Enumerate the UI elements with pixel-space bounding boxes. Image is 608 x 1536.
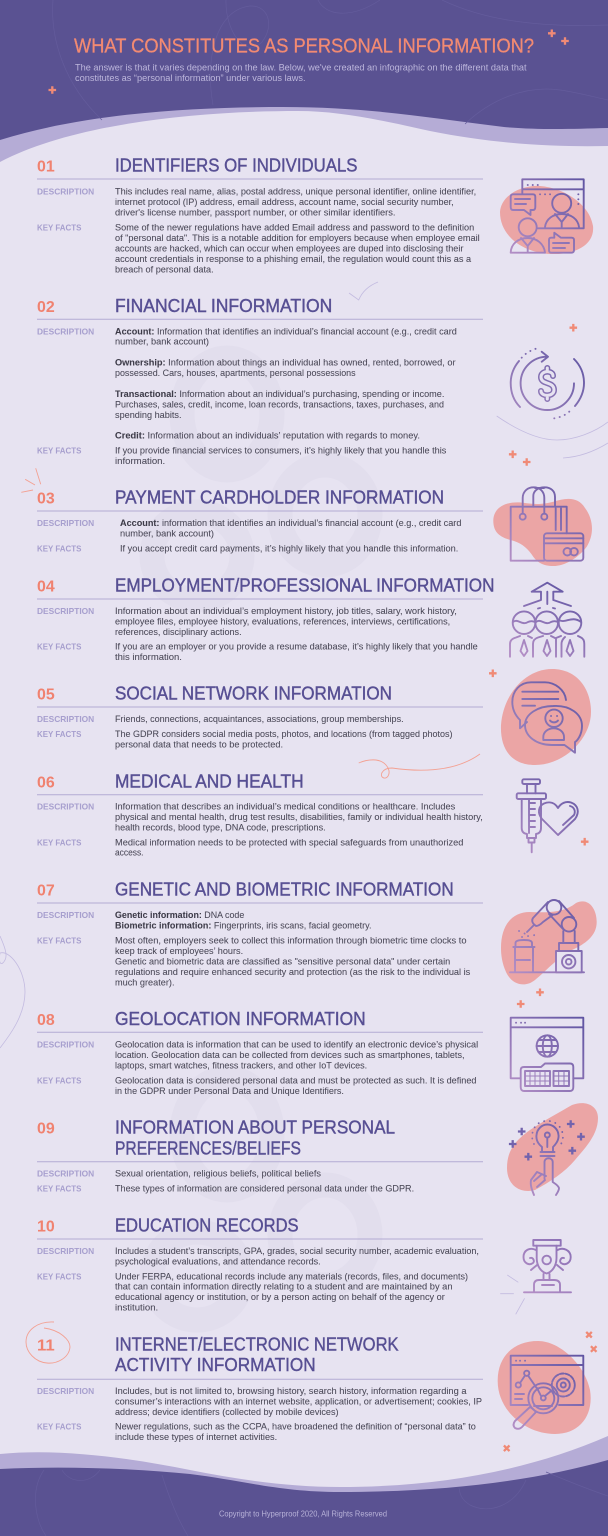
description text: employee files, employee history, evaluations, references, interviews, certifications,	[115, 616, 450, 626]
label key facts: KEY FACTS	[37, 1271, 82, 1281]
section 10	[37, 1215, 483, 1313]
description text: address; device identifiers (collected by mobile devices)	[115, 1407, 338, 1417]
description text	[115, 802, 483, 833]
robot plus signs	[517, 838, 588, 1008]
footer decorative lines	[35, 1470, 608, 1536]
key facts text	[115, 446, 447, 466]
label key facts: KEY FACTS	[37, 1422, 82, 1432]
label key facts: KEY FACTS	[37, 544, 82, 554]
icon: genetic robot arm	[501, 838, 597, 1008]
label description: DESCRIPTION	[37, 606, 94, 616]
icon: social chat bubbles	[501, 669, 591, 765]
section 02	[37, 296, 483, 466]
description text	[115, 186, 476, 217]
number 05: 05	[37, 687, 55, 704]
label description: DESCRIPTION	[37, 1246, 94, 1256]
key facts text: information.	[115, 456, 165, 466]
section 04	[37, 575, 494, 662]
key facts text	[115, 1422, 476, 1442]
description text: Account: Information that identifies an individual’s financial account (e.g., credit card	[115, 326, 457, 336]
key facts text: Most often, employers seek to collect this information through biometric time clocks to	[115, 936, 466, 946]
key facts text	[115, 642, 478, 662]
heading 02: FINANCIAL INFORMATION	[115, 296, 332, 316]
key facts text: much greater).	[115, 977, 174, 987]
heading 09: PREFERENCES/BELIEFS	[115, 1138, 301, 1158]
key facts text: keep track of employees’ hours.	[115, 946, 243, 956]
description text	[115, 1386, 482, 1417]
heading 11	[115, 1334, 399, 1375]
number 09: 09	[37, 1120, 55, 1137]
icon: finance dollar cycle	[509, 324, 584, 466]
number 11: 11	[37, 1337, 55, 1354]
description text: internet protocol (IP) address, email address, account name, social security number,	[115, 197, 454, 207]
description text: Transactional: Information about an individual’s purchasing, spending or income.	[115, 389, 444, 399]
key facts text: in the GDPR under Personal Data and Unique Identifiers.	[115, 1086, 344, 1096]
number 04: 04	[37, 578, 55, 595]
key facts text: access.	[115, 848, 144, 858]
footer panel	[0, 1460, 608, 1536]
description text: possessed. Cars, houses, apartments, personal possessions	[115, 368, 356, 378]
bottom wave band	[0, 1436, 608, 1536]
number 01: 01	[37, 159, 55, 176]
description text: Sexual orientation, religious beliefs, political beliefs	[115, 1169, 321, 1179]
label key facts: KEY FACTS	[37, 837, 82, 847]
description text: Credit: Information about an individuals’ reputation with regards to money.	[115, 431, 420, 441]
description text: Account: information that identifies an individual’s financial account (e.g., credit card	[120, 518, 461, 528]
description text	[115, 606, 457, 637]
key facts text: If you accept credit card payments, it’s highly likely that you handle this information.	[120, 544, 458, 554]
decorative circle around 11	[26, 1322, 70, 1363]
description text: health records, blood type, DNA code, prescriptions.	[115, 823, 326, 833]
label description: DESCRIPTION	[37, 1386, 94, 1396]
description text: consumer’s interactions with an internet website, application, or advertisement; cookies, IP	[115, 1397, 482, 1407]
watermark rings	[152, 358, 370, 1320]
heading 11: INTERNET/ELECTRONIC NETWORK	[115, 1334, 399, 1354]
icon: shopping bag and card	[493, 487, 592, 566]
key facts text	[115, 1271, 468, 1313]
key facts text: of "personal data". This is a notable addition for employers because when employee email	[115, 233, 480, 243]
heading 04: EMPLOYMENT/PROFESSIONAL INFORMATION	[115, 575, 494, 595]
decorative coral swirl	[359, 754, 480, 778]
description text: location. Geolocation data can be collected from devices such as smartphones, tablets,	[115, 1050, 464, 1060]
key facts text	[115, 837, 463, 858]
heading 09	[115, 1117, 395, 1158]
label key facts: KEY FACTS	[37, 936, 82, 946]
intro text: The answer is that it varies depending on the law. Below, we've created an infographic on the different data that	[75, 63, 527, 73]
icon: syringe and heart	[517, 779, 578, 852]
key facts text	[115, 223, 480, 274]
description text: number, bank account)	[120, 528, 214, 538]
label description: DESCRIPTION	[37, 326, 94, 336]
purple plus signs	[509, 1120, 585, 1160]
description text	[115, 1246, 479, 1266]
description text: Includes, but is not limited to, browsing history, search history, information regarding a	[115, 1386, 466, 1396]
number 07: 07	[37, 882, 55, 899]
section 11	[37, 1334, 483, 1442]
label key facts: KEY FACTS	[37, 223, 82, 233]
section 01	[37, 156, 483, 274]
description text	[115, 1040, 478, 1071]
key facts text	[115, 1076, 476, 1096]
heading 09: INFORMATION ABOUT PERSONAL	[115, 1117, 395, 1137]
label description: DESCRIPTION	[37, 518, 94, 528]
key facts text: personal data that needs to be protected.	[115, 740, 283, 750]
description text: Geolocation data is information that can be used to identify an electronic device’s physical	[115, 1040, 478, 1050]
number 10: 10	[37, 1218, 55, 1235]
description text	[120, 518, 461, 538]
plus near social icon	[489, 670, 497, 677]
description text: Biometric information: Fingerprints, iris scans, facial geometry.	[115, 921, 372, 931]
description text: Genetic information: DNA code	[115, 910, 244, 920]
icon: personal beliefs lightbulb	[507, 1103, 598, 1195]
label key facts: KEY FACTS	[37, 642, 82, 652]
intro text	[75, 63, 527, 83]
heading 03: PAYMENT CARDHOLDER INFORMATION	[115, 487, 444, 507]
header panel	[0, 0, 608, 140]
header wave band	[0, 0, 608, 162]
label description: DESCRIPTION	[37, 1040, 94, 1050]
key facts text: regulations and require enhanced security and protection (as the risk to the individual is	[115, 967, 471, 977]
heading 10: EDUCATION RECORDS	[115, 1215, 299, 1235]
finance plus signs	[509, 324, 577, 466]
description text	[115, 910, 372, 931]
description text: driver's license number, passport number, or other similar identifiers.	[115, 207, 396, 217]
description text: physical and mental health, drug test results, disabilities, family or individual health history,	[115, 812, 483, 822]
label key facts: KEY FACTS	[37, 1076, 82, 1086]
title: WHAT CONSTITUTES AS PERSONAL INFORMATION?	[74, 36, 534, 58]
description text: Information that describes an individual’s medical conditions or healthcare. Includes	[115, 802, 456, 812]
description text: psychological evaluations, and attendance records.	[115, 1256, 321, 1266]
key facts text: Some of the newer regulations have added Email address and password to the definition	[115, 223, 474, 233]
key facts text: Newer regulations, such as the CCPA, have broadened the definition of “personal data” to	[115, 1422, 476, 1432]
icon: education trophy	[524, 1240, 571, 1292]
label key facts: KEY FACTS	[37, 446, 82, 456]
coral x marks	[504, 1332, 596, 1451]
key facts text: educational agency or institution, or by a person acting on behalf of the agency or	[115, 1292, 445, 1302]
number 08: 08	[37, 1012, 55, 1029]
description text: references, disciplinary actions.	[115, 627, 242, 637]
key facts text: Under FERPA, educational records include any materials (records, files, and documents)	[115, 1271, 468, 1281]
key facts text	[115, 729, 453, 750]
heading 01: IDENTIFIERS OF INDIVIDUALS	[115, 156, 358, 176]
intro text: constitutes as “personal information” under various laws.	[75, 73, 306, 83]
key facts text: The GDPR considers social media posts, photos, and locations (from tagged photos)	[115, 729, 453, 739]
key facts text: Genetic and biometric data are classified as "sensitive personal data" under certain	[115, 957, 450, 967]
description text: spending habits.	[115, 410, 182, 420]
section 08	[37, 1009, 483, 1096]
description text: Information about an individual’s employment history, job titles, salary, work history,	[115, 606, 457, 616]
description text: number, bank account)	[115, 337, 209, 347]
number 06: 06	[37, 774, 55, 791]
key facts text: These types of information are considered personal data under the GDPR.	[115, 1184, 414, 1194]
key facts text	[115, 936, 471, 987]
key facts text: that can contain information directly relating to a student and are maintained by an	[115, 1282, 452, 1292]
heading 07: GENETIC AND BIOMETRIC INFORMATION	[115, 879, 454, 899]
decorative coral rays	[21, 468, 41, 492]
decorative left curve	[0, 936, 25, 1048]
key facts text: account credentials in response to a phishing email, the regulation would count this as a	[115, 254, 471, 264]
description text: laptops, smart watches, fitness trackers, and other IoT devices.	[115, 1061, 367, 1071]
description text: Friends, connections, acquaintances, associations, group memberships.	[115, 714, 404, 724]
label description: DESCRIPTION	[37, 1169, 94, 1179]
heading 05: SOCIAL NETWORK INFORMATION	[115, 684, 392, 704]
heading 08: GEOLOCATION INFORMATION	[115, 1009, 366, 1029]
label description: DESCRIPTION	[37, 910, 94, 920]
description text: Purchases, sales, credit, income, loan records, transactions, taxes, purchases, and	[115, 399, 444, 409]
section 09	[37, 1117, 483, 1194]
number 02: 02	[37, 299, 55, 316]
icon: internet analytics	[498, 1332, 596, 1451]
section 06	[37, 771, 483, 858]
icon: employees group	[510, 583, 584, 657]
label key facts: KEY FACTS	[37, 729, 82, 739]
description text: This includes real name, alias, postal address, unique personal identifier, online identifier,	[115, 186, 476, 196]
key facts text: include these types of internet activities.	[115, 1432, 277, 1442]
key facts text: breach of personal data.	[115, 264, 214, 274]
description text	[115, 326, 457, 441]
key facts text: this information.	[115, 652, 182, 662]
number 03: 03	[37, 490, 55, 507]
label description: DESCRIPTION	[37, 186, 94, 196]
description text: Includes a student’s transcripts, GPA, grades, social security number, academic evaluation,	[115, 1246, 479, 1256]
key facts text: institution.	[115, 1303, 158, 1313]
section 03	[37, 487, 483, 554]
key facts text: If you provide financial services to consumers, it’s highly likely that you handle this	[115, 446, 447, 456]
key facts text: Geolocation data is considered personal data and must be protected as such. It is defined	[115, 1076, 476, 1086]
icon: video meeting	[500, 179, 593, 254]
key facts text: accounts are hacked, which can occur when employees are duped into disclosing their	[115, 244, 463, 254]
label description: DESCRIPTION	[37, 714, 94, 724]
heading 11: ACTIVITY INFORMATION	[115, 1355, 316, 1375]
label description: DESCRIPTION	[37, 802, 94, 812]
label key facts: KEY FACTS	[37, 1184, 82, 1194]
icon: browser keyboard	[511, 1018, 583, 1091]
decorative rays near trophy	[500, 1275, 525, 1314]
section 05	[37, 684, 483, 750]
copyright: Copyright to Hyperproof 2020, All Rights Reserved	[219, 1510, 387, 1519]
section 07	[37, 879, 483, 987]
heading 06: MEDICAL AND HEALTH	[115, 771, 304, 791]
decorative check stroke	[349, 282, 378, 300]
decorative arcs near finance icon	[497, 416, 608, 458]
header plus signs	[48, 30, 569, 94]
description text: Ownership: Information about things an individual has owned, rented, borrowed, or	[115, 358, 456, 368]
header decorative lines	[53, 0, 608, 124]
key facts text: Medical information needs to be protected with special safeguards from unauthorized	[115, 837, 463, 847]
key facts text: If you are an employer or you provide a resume database, it’s highly likely that you handle	[115, 642, 478, 652]
